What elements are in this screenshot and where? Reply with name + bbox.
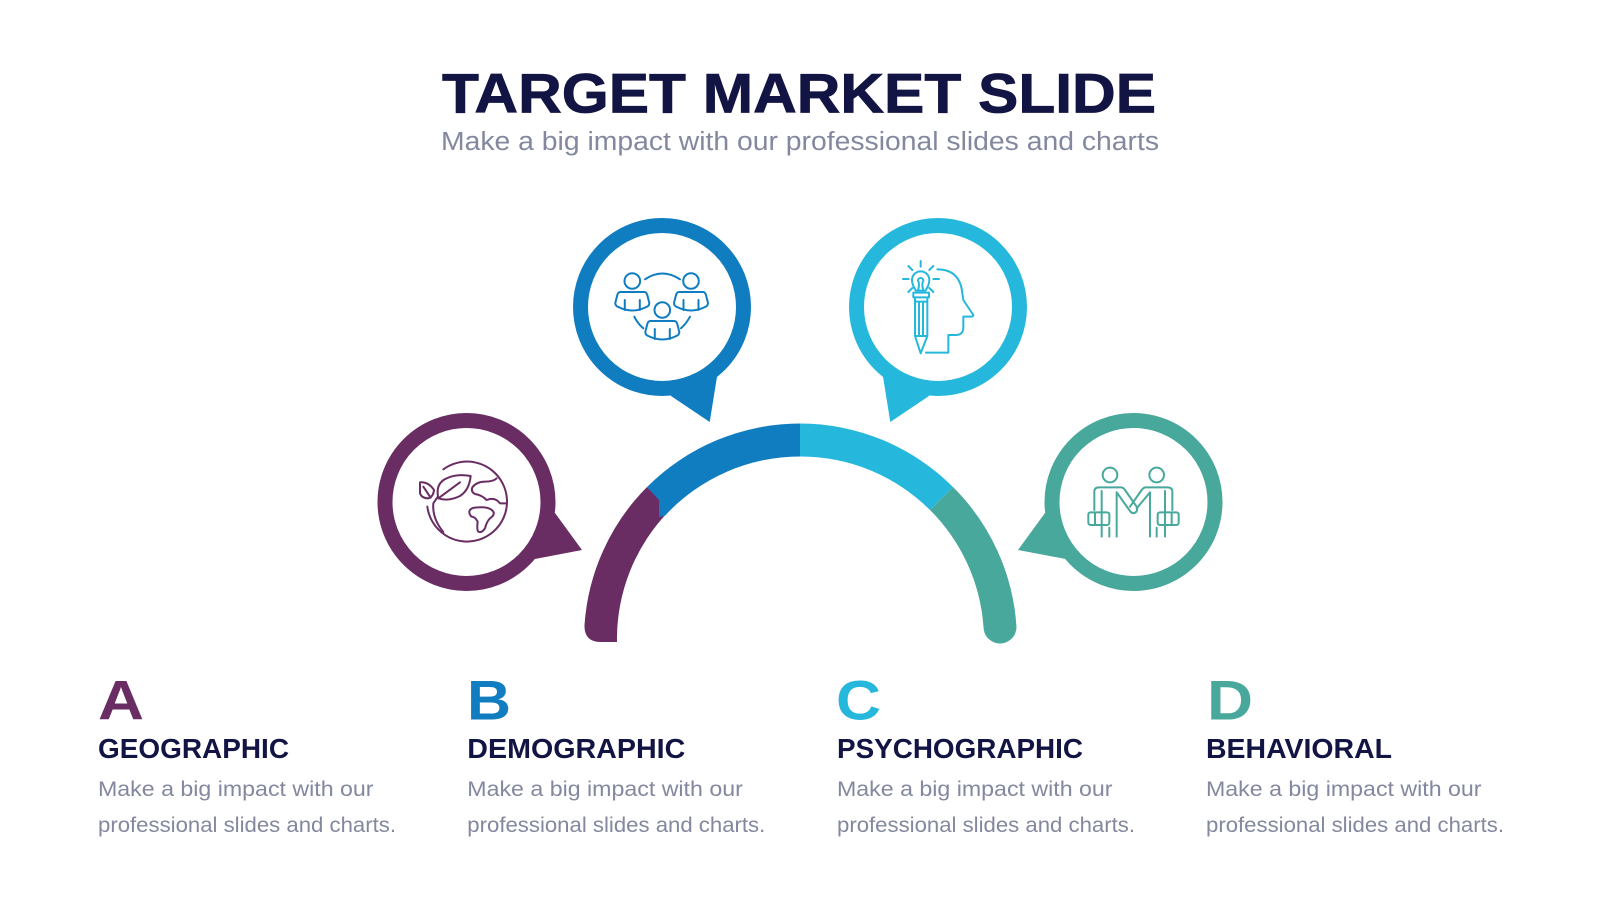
description: professional slides and charts. [1206, 814, 1504, 837]
subtitle: Make a big impact with our professional slides and charts [441, 128, 1159, 156]
heading: PSYCHOGRAPHIC [837, 733, 1083, 764]
icon: globe with leaves [420, 462, 507, 542]
description: professional slides and charts. [837, 814, 1135, 837]
letter A: A [98, 668, 144, 732]
arc segment: demographic [647, 424, 800, 517]
panel: geographic [98, 668, 396, 837]
description: Make a big impact with our [1206, 778, 1482, 801]
panel: demographic [467, 668, 765, 837]
panel: psychographic [836, 668, 1135, 837]
letter D: D [1207, 668, 1253, 732]
heading: GEOGRAPHIC [98, 733, 289, 764]
callout: behavioral [1018, 420, 1215, 584]
description: professional slides and charts. [98, 814, 396, 837]
icon: two people shaking hands [1088, 468, 1179, 537]
arc segment: behavioral [930, 487, 1016, 644]
callout: psychographic [856, 226, 1020, 422]
description: Make a big impact with our [837, 778, 1113, 801]
callout: geographic [385, 420, 582, 584]
letter B: B [467, 668, 511, 732]
panel: behavioral [1206, 668, 1504, 837]
arc segment: geographic [584, 487, 670, 642]
icon: head with bulb and pencil [903, 261, 973, 353]
arc segment: psychographic [800, 424, 953, 510]
letter C: C [836, 668, 881, 732]
heading: DEMOGRAPHIC [467, 733, 685, 764]
icon: three connected people [615, 273, 708, 340]
description: Make a big impact with our [467, 778, 743, 801]
heading: BEHAVIORAL [1206, 733, 1392, 764]
description: Make a big impact with our [98, 778, 374, 801]
semicircular arc chart [584, 424, 1016, 644]
callout: demographic [580, 226, 744, 422]
description: professional slides and charts. [467, 814, 765, 837]
title: TARGET MARKET SLIDE [442, 62, 1156, 124]
